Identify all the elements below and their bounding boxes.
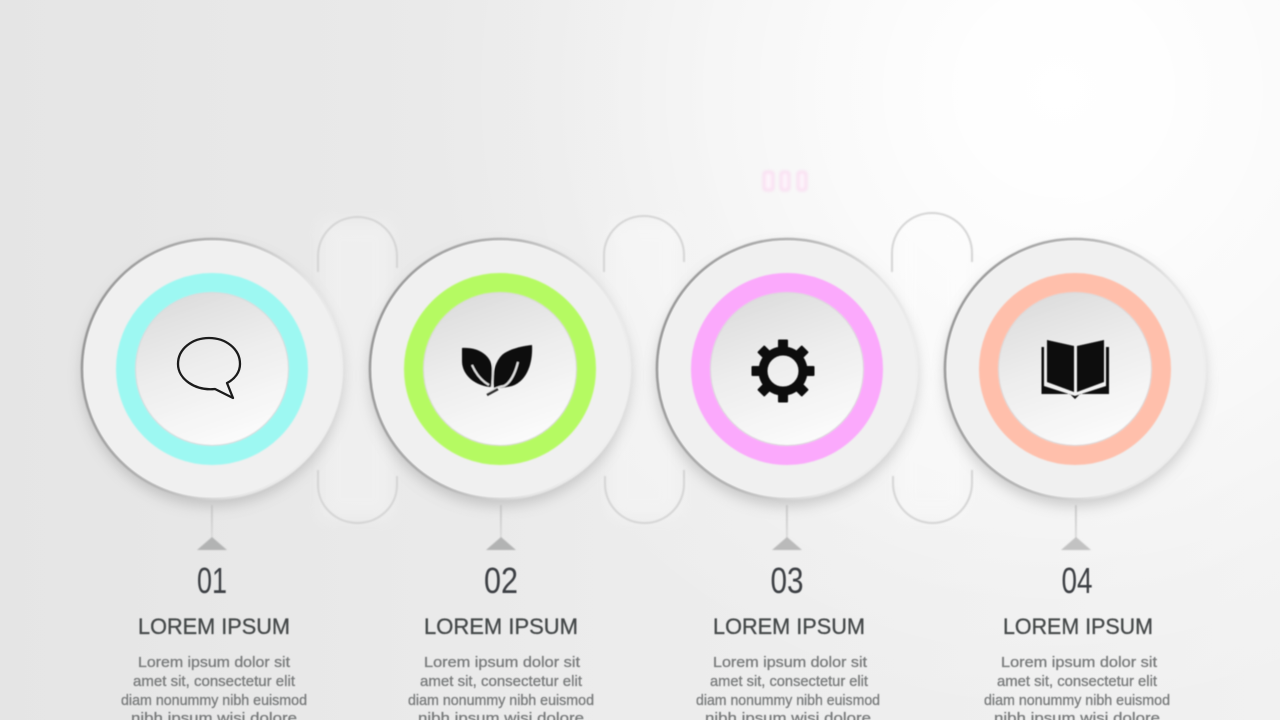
- ring: pink: [700, 282, 874, 456]
- step 2 text: LOREM IPSUM: [424, 614, 578, 639]
- step 2 text: diam nonummy nibh euismod: [408, 693, 594, 709]
- step 1 text: Lorem ipsum dolor sit: [138, 655, 290, 671]
- step 1 text: 01: [197, 560, 227, 601]
- step 2 text: Lorem ipsum dolor sit: [424, 655, 580, 671]
- step 2 circle: [370, 239, 630, 506]
- step 1 text: diam nonummy nibh euismod: [121, 693, 307, 709]
- step 1 text: [121, 560, 307, 720]
- step 3 text: Lorem ipsum dolor sit: [713, 655, 867, 671]
- step 2 text: [408, 560, 594, 720]
- connector lobes between steps: [318, 213, 972, 523]
- connector 3: [892, 213, 972, 523]
- faint pink title glyphs: [764, 172, 806, 190]
- step 3 text: LOREM IPSUM: [713, 614, 865, 639]
- step 3 circle: [657, 239, 917, 506]
- step 1 circle: [82, 239, 342, 506]
- icon: speech bubble: [178, 338, 240, 398]
- ring: salmon: [988, 282, 1162, 456]
- step 4 text: [984, 560, 1170, 720]
- connector 1: [318, 217, 397, 523]
- icon: gear: [752, 340, 814, 402]
- ring: cyan: [126, 282, 298, 456]
- step 3 text: diam nonummy nibh euismod: [696, 693, 880, 709]
- icon: open book: [1042, 340, 1109, 399]
- step 1 stem marker: [197, 505, 227, 550]
- ring: green: [414, 282, 586, 456]
- step 3 text: amet sit, consectetur elit: [710, 674, 868, 690]
- step 3 text: [696, 560, 880, 720]
- step 3 text: 03: [770, 560, 804, 601]
- step 4 text: 04: [1062, 560, 1092, 601]
- step 4 text: Lorem ipsum dolor sit: [1001, 655, 1157, 671]
- step 4 text: LOREM IPSUM: [1003, 614, 1153, 639]
- step 2 stem marker: [486, 505, 516, 550]
- step 2 text: 02: [484, 560, 518, 601]
- step 2 text: amet sit, consectetur elit: [420, 674, 582, 690]
- connector 2: [604, 216, 684, 523]
- step 4 text: diam nonummy nibh euismod: [984, 693, 1170, 709]
- step 4 stem marker: [1061, 505, 1091, 550]
- step 4 text: amet sit, consectetur elit: [997, 674, 1157, 690]
- step 4 circle: [945, 239, 1205, 506]
- step 1 text: amet sit, consectetur elit: [133, 674, 295, 690]
- icon: leaves: [462, 345, 532, 395]
- step 3 stem marker: [772, 505, 802, 550]
- step 1 text: LOREM IPSUM: [138, 614, 290, 639]
